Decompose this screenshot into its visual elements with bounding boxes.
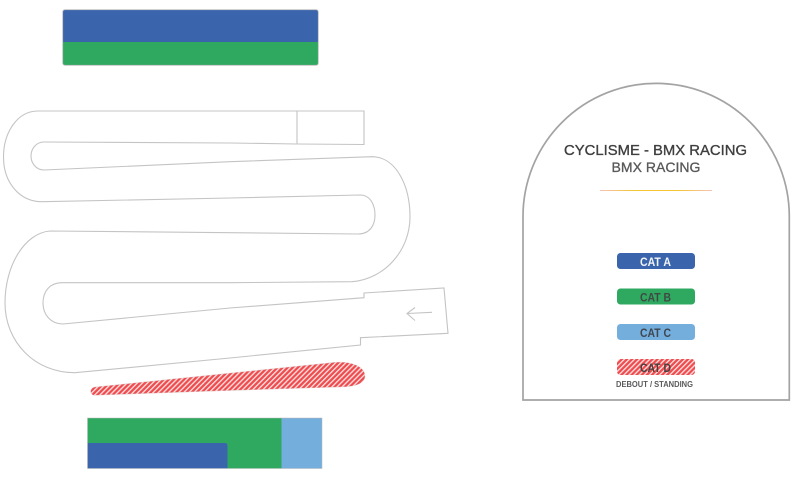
top seating bar xyxy=(63,10,318,65)
panel subtitle: BMX RACING xyxy=(612,159,700,175)
direction arrow xyxy=(407,308,432,320)
bar outline xyxy=(63,10,318,65)
hatched standing area xyxy=(91,362,365,395)
bottom seating bar xyxy=(88,418,322,468)
legend item: CAT A xyxy=(617,253,695,269)
legend item: CAT C xyxy=(617,324,695,340)
bar section: green xyxy=(63,42,318,65)
bar section: light blue xyxy=(282,418,322,468)
legend item: CAT C: CAT C xyxy=(640,328,671,340)
bar section: green xyxy=(88,418,282,468)
legend item: CAT D: CAT D xyxy=(640,363,671,375)
legend item: CAT B xyxy=(617,288,695,304)
divider rule xyxy=(600,190,712,191)
BMX track outline xyxy=(4,111,448,373)
bar outline xyxy=(88,418,322,468)
legend item: CAT A: CAT A xyxy=(640,257,671,269)
legend item: CAT D xyxy=(617,359,695,375)
bar section: blue xyxy=(63,10,318,42)
start gate divider xyxy=(296,111,298,144)
legend item: CAT B: CAT B xyxy=(640,292,671,304)
arch outline xyxy=(523,83,789,400)
standing note: DEBOUT / STANDING xyxy=(616,379,693,389)
track path xyxy=(4,111,448,373)
bar section: blue xyxy=(88,443,228,468)
panel title: CYCLISME - BMX RACING xyxy=(564,142,747,159)
legend panel xyxy=(523,83,789,400)
